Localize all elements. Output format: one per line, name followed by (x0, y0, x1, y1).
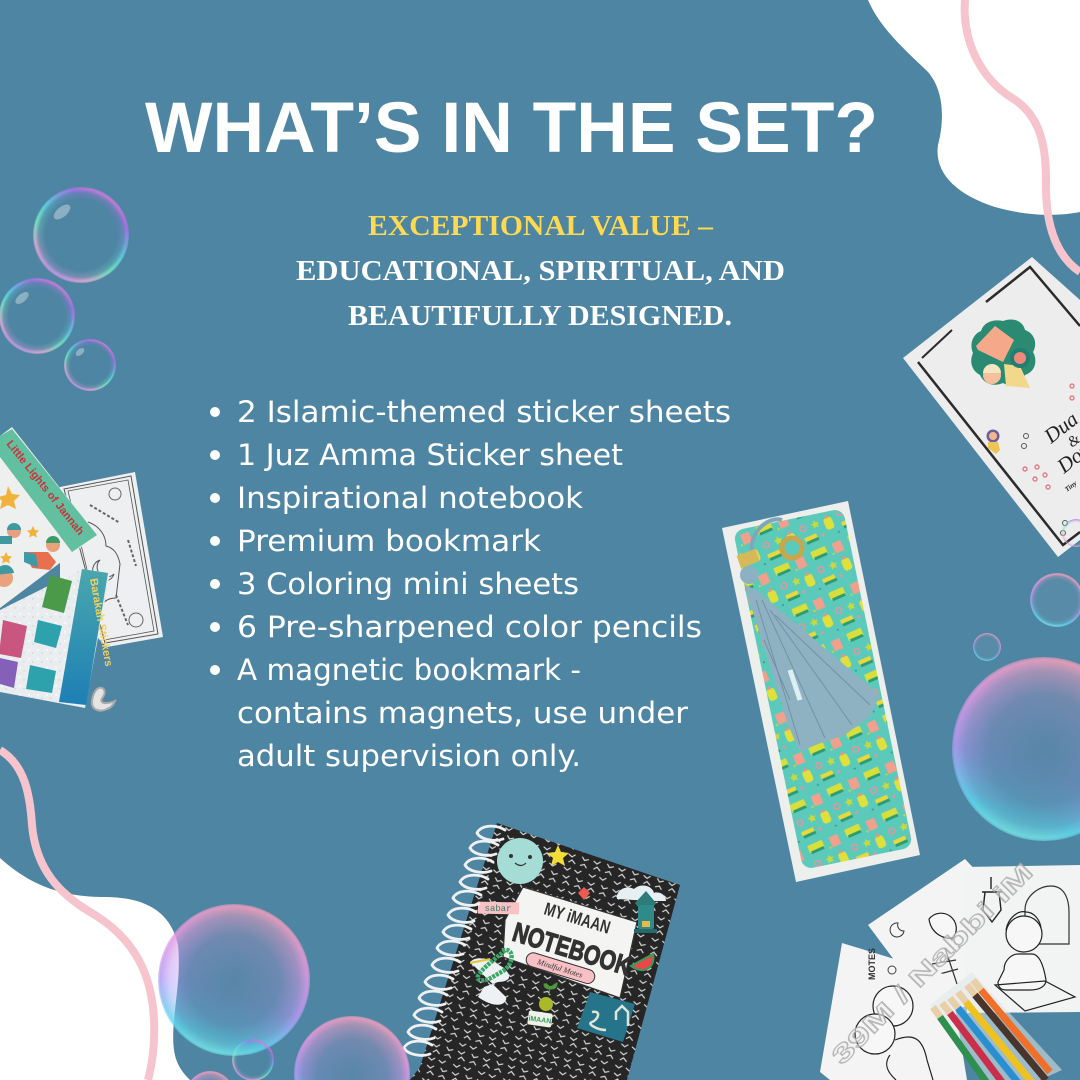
notebook title small: MY iMAAN (542, 899, 613, 938)
product: colouring sheets and pencils (820, 858, 1080, 1080)
card sleeve (903, 257, 1080, 557)
sabar label: sabar (484, 904, 512, 914)
decorative blob: top right (868, 0, 1080, 215)
subtitle (296, 210, 785, 332)
iMAAN label (527, 1010, 553, 1028)
product: notebook (404, 823, 680, 1080)
colouring page (60, 472, 163, 647)
tassel knot (740, 566, 758, 584)
colour pencils (930, 972, 1062, 1080)
notebook pill (524, 951, 596, 985)
pencil: blue (950, 998, 1024, 1080)
lantern sticker (634, 891, 657, 933)
card title (1044, 414, 1080, 492)
prayer beads sticker (470, 950, 512, 1005)
notebook label (503, 887, 637, 998)
sticker sheet: Barakah Stickers: Barakah Stickers (87, 577, 114, 667)
decorative curve: bottom left (0, 750, 154, 1080)
sabar label (478, 902, 519, 914)
bubble: right tiny (973, 633, 1001, 661)
bubble: left small (64, 339, 116, 391)
pencil: red (942, 1003, 1008, 1080)
sticker sheet: Little Lights of Jannah: Little Lights of Jannah (4, 438, 86, 538)
tassel cap (737, 549, 760, 568)
bookmark eyelet (782, 538, 802, 558)
tassel (744, 584, 880, 752)
bookmark face (733, 508, 913, 870)
colouring sheet: mother and child: MOTES (867, 948, 877, 980)
moon sticker (497, 838, 543, 884)
watermelon sticker (631, 954, 653, 970)
pencil: orange (973, 980, 1050, 1072)
notebook pill: Mindful Motes (535, 957, 584, 980)
contents list: 6 Pre-sharpened color pencils (237, 610, 702, 644)
bubble: right large (952, 657, 1080, 841)
pencil: yellow (958, 992, 1038, 1080)
subtitle line: educational: EDUCATIONAL, SPIRITUAL, AND (296, 255, 785, 287)
bookmark sleeve (722, 501, 920, 882)
title: WHAT’S IN THE SET? (145, 89, 878, 168)
plant sticker (539, 983, 557, 1011)
cloud sticker (617, 886, 666, 901)
colouring sheet: girl with flowers (868, 859, 985, 1016)
card border left stub (922, 330, 952, 358)
badge: flower pin (971, 319, 1035, 388)
sticker sheet: Little Lights of Jannah (0, 427, 97, 608)
bubble: left middle (0, 278, 75, 354)
notebook cover (410, 823, 680, 1080)
contents list (210, 395, 731, 773)
product: dua card (903, 257, 1080, 557)
hearts (1023, 384, 1074, 489)
bubble: bottom left large (158, 904, 310, 1056)
notebook title large: NOTEBOOK (509, 917, 635, 982)
contents list: 2 Islamic-themed sticker sheets (237, 395, 731, 429)
product: bookmark (722, 501, 920, 882)
contents list: Premium bookmark (237, 524, 541, 558)
spiral binding (404, 826, 505, 1055)
star sticker (547, 845, 569, 866)
card border top (986, 267, 1080, 326)
watermark: 39M / Nabbi iM (826, 858, 1039, 1070)
bubble: bottom edge (191, 1071, 229, 1080)
decorative curve: top right (965, 0, 1080, 272)
decorative blob: bottom left (0, 858, 190, 1080)
contents list: 3 Coloring mini sheets (237, 567, 579, 601)
contents list: 1 Juz Amma Sticker sheet (237, 438, 623, 472)
diamond sticker (578, 887, 590, 900)
blue patch sticker (577, 992, 635, 1042)
contents list: adult supervision only. (237, 739, 581, 773)
card subtitle: Tiny (1063, 479, 1079, 494)
small stars (1022, 434, 1068, 536)
subtitle line: designed: BEAUTIFULLY DESIGNED. (348, 300, 732, 332)
contents list: A magnetic bookmark - (237, 653, 581, 687)
card border (918, 362, 1080, 545)
bubble: bottom medium (294, 1016, 410, 1080)
pencil: green (933, 1007, 992, 1080)
bubble: right small upper (1030, 573, 1080, 627)
bubble: bottom small (232, 1039, 274, 1080)
figure sticker (986, 430, 1000, 454)
contents list: Inspirational notebook (237, 481, 583, 515)
subtitle line: value: EXCEPTIONAL VALUE – (368, 210, 714, 242)
colouring sheet: mother and child (820, 943, 967, 1080)
acrylic letter charm (92, 688, 115, 711)
bubble: top left large (33, 187, 129, 283)
bubble: card corner (1062, 519, 1080, 547)
pencil: brown (967, 985, 1046, 1080)
colouring sheet: praying boy (963, 865, 1080, 1013)
iMAAN label: iMAAN (528, 1015, 552, 1026)
contents list: contains magnets, use under (237, 696, 688, 730)
product: sticker sheets and colouring page (0, 427, 163, 711)
tassel cord (752, 519, 782, 556)
sticker sheet: Barakah Stickers (0, 569, 114, 708)
